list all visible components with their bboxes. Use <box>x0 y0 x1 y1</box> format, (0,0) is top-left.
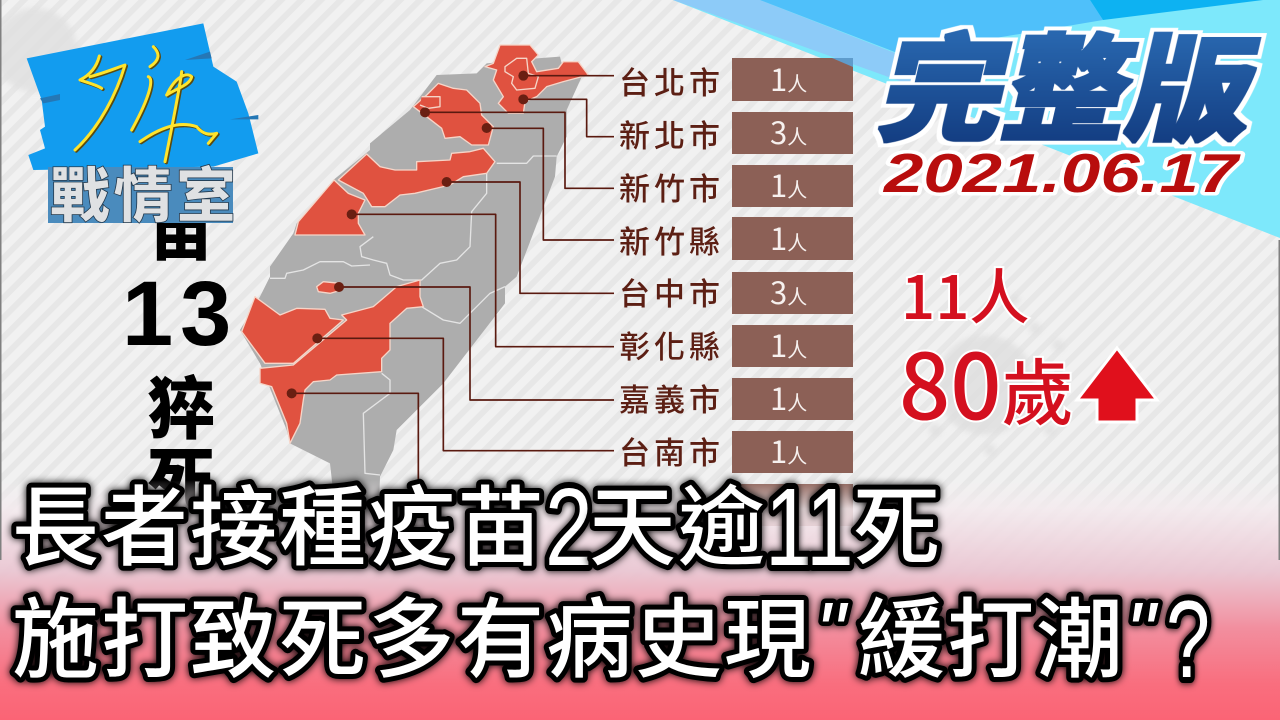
callout: 11 people over 80: 80歲 <box>899 315 1074 445</box>
subtitle line 1 <box>12 458 942 588</box>
subtitle line 1: 長者接種疫苗 <box>12 458 546 584</box>
county labels: 新竹市 <box>619 164 724 209</box>
subtitle line 2 <box>12 570 1210 701</box>
county labels: 台北市 <box>619 58 724 103</box>
map of Taiwan <box>240 45 614 523</box>
title: 完整版 <box>867 0 1278 164</box>
death count boxes: 3人 <box>770 268 807 313</box>
red counties <box>242 45 588 443</box>
death count boxes: 1人 <box>770 374 807 419</box>
death count boxes: 1人 <box>770 321 807 366</box>
left vertical text: 13 <box>122 263 238 365</box>
virus watermark <box>929 295 1064 456</box>
left vertical text: 猝 <box>147 372 215 448</box>
bottom pink gradient band <box>0 480 1280 720</box>
county labels: 新竹縣 <box>619 217 724 262</box>
left vertical text: 死 <box>147 443 215 519</box>
subtitle line 2: " <box>815 586 849 681</box>
gray island base <box>240 57 583 523</box>
subtitle line 2: " <box>1125 586 1159 681</box>
left vertical text: 苗 <box>148 194 214 268</box>
death count boxes <box>732 55 853 526</box>
subtitle line 1: 1 <box>806 466 854 588</box>
death count boxes: 1人 <box>770 161 807 206</box>
war room plate <box>48 167 233 223</box>
county labels <box>619 58 724 473</box>
county labels: 台南市 <box>619 428 724 473</box>
county labels: 台中市 <box>619 269 724 314</box>
subtitle line 1: 天逾 <box>589 458 767 584</box>
location dots <box>287 71 528 398</box>
left vertical text <box>122 194 238 519</box>
top-left virus watermark <box>0 8 77 92</box>
blue brush panel <box>27 23 258 170</box>
top-right blue corner <box>673 0 1280 238</box>
callout: 11 people over 80 <box>899 250 1157 445</box>
death count boxes: 1人 <box>770 214 807 259</box>
subtitle line 1: 2 <box>545 466 593 588</box>
logo <box>27 23 258 235</box>
subtitle line 2: 緩打潮 <box>858 570 1125 696</box>
logo: 戰情室 <box>50 148 239 235</box>
county labels: 新北市 <box>619 111 724 156</box>
death count boxes: 1人 <box>770 55 807 100</box>
edge lines <box>0 0 1280 560</box>
icon: up arrow <box>1077 348 1157 422</box>
county borders <box>270 156 557 475</box>
callout: 11 people over 80: 11人 <box>901 250 1029 337</box>
subtitle line 2: ? <box>1166 578 1210 701</box>
death count boxes: 3人 <box>770 108 807 153</box>
signature shadow <box>76 48 218 163</box>
subtitle line 2: 施打致死多有病史現 <box>12 570 813 696</box>
signature <box>75 47 217 162</box>
date: 2021.06.17 <box>883 142 1241 204</box>
county labels: 嘉義市 <box>619 375 724 420</box>
subtitle line 1: 1 <box>765 466 813 588</box>
subtitle line 1: 死 <box>853 458 942 584</box>
leader lines <box>292 76 614 483</box>
death count boxes: 1人 <box>770 427 807 472</box>
county labels: 彰化縣 <box>619 322 724 367</box>
